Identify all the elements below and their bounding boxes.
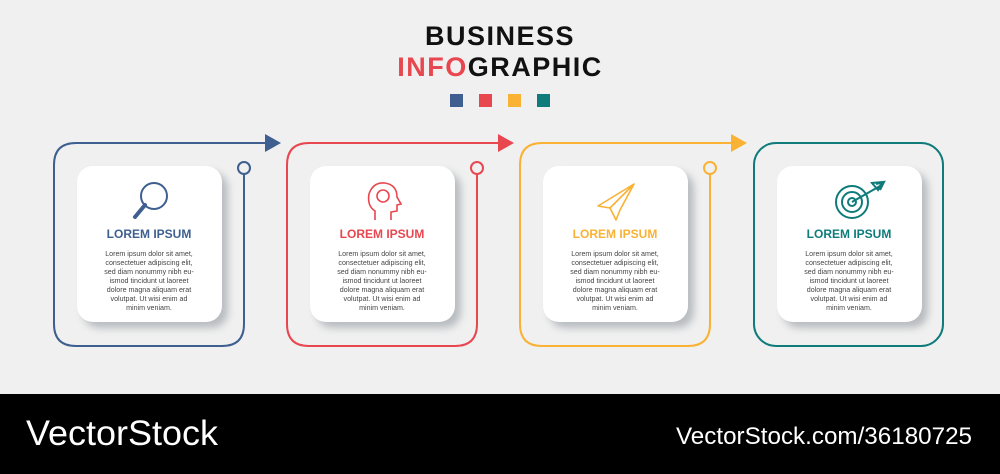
- step 1 panel: consectetuer adipiscing elit,: [105, 259, 193, 267]
- step 3 panel: volutpat. Ut wisi enim ad: [577, 295, 653, 303]
- icon: paper plane: [598, 184, 634, 220]
- step 4 panel: consectetuer adipiscing elit,: [805, 259, 893, 267]
- footer band: VectorStock: [26, 414, 219, 453]
- icon: target: [836, 182, 884, 218]
- step 4 panel: [754, 143, 943, 346]
- step 4 panel: volutpat. Ut wisi enim ad: [811, 295, 887, 303]
- step 2 panel: sed diam nonummy nibh eu-: [337, 268, 427, 276]
- step 4 panel: ismod tincidunt ut laoreet: [810, 277, 888, 285]
- step 3 panel: LOREM IPSUM: [573, 227, 657, 241]
- step 4 panel: Lorem ipsum dolor sit amet,: [805, 250, 893, 258]
- step 3 panel: Lorem ipsum dolor sit amet,: [571, 250, 659, 258]
- footer band: VectorStock.com/36180725: [676, 423, 972, 450]
- step 3 panel: sed diam nonummy nibh eu-: [570, 268, 660, 276]
- step 4 panel: sed diam nonummy nibh eu-: [804, 268, 894, 276]
- step 1 panel: sed diam nonummy nibh eu-: [104, 268, 194, 276]
- title: BUSINESS: [425, 21, 575, 51]
- step 3 panel: ismod tincidunt ut laoreet: [576, 277, 654, 285]
- title: [397, 21, 603, 82]
- step 1 panel: ismod tincidunt ut laoreet: [110, 277, 188, 285]
- step 2 panel: volutpat. Ut wisi enim ad: [344, 295, 420, 303]
- step 1 panel: volutpat. Ut wisi enim ad: [111, 295, 187, 303]
- step 2 panel: ismod tincidunt ut laoreet: [343, 277, 421, 285]
- step 2 panel: consectetuer adipiscing elit,: [338, 259, 426, 267]
- step 1 panel: minim veniam.: [126, 304, 172, 312]
- step 3 panel: [520, 134, 747, 346]
- step 2 panel: minim veniam.: [359, 304, 405, 312]
- step 3 panel: consectetuer adipiscing elit,: [571, 259, 659, 267]
- step 1 panel: dolore magna aliquam erat: [107, 286, 191, 294]
- step 4 panel: minim veniam.: [826, 304, 872, 312]
- step 3 panel: minim veniam.: [592, 304, 638, 312]
- icon: magnifier: [135, 183, 167, 217]
- step 3 panel: dolore magna aliquam erat: [573, 286, 657, 294]
- step 2 panel: LOREM IPSUM: [340, 227, 424, 241]
- step 2 panel: Lorem ipsum dolor sit amet,: [338, 250, 426, 258]
- step 4 panel: LOREM IPSUM: [807, 227, 891, 241]
- step 1 panel: [54, 134, 281, 346]
- step 2 panel: [287, 134, 514, 346]
- step 2 panel: dolore magna aliquam erat: [340, 286, 424, 294]
- step 1 panel: Lorem ipsum dolor sit amet,: [105, 250, 193, 258]
- footer band: [0, 394, 1000, 474]
- icon: head with brain: [369, 183, 401, 220]
- color squares: [450, 94, 550, 107]
- step 1 panel: LOREM IPSUM: [107, 227, 191, 241]
- step 4 panel: dolore magna aliquam erat: [807, 286, 891, 294]
- title: INFOGRAPHIC: [397, 52, 603, 82]
